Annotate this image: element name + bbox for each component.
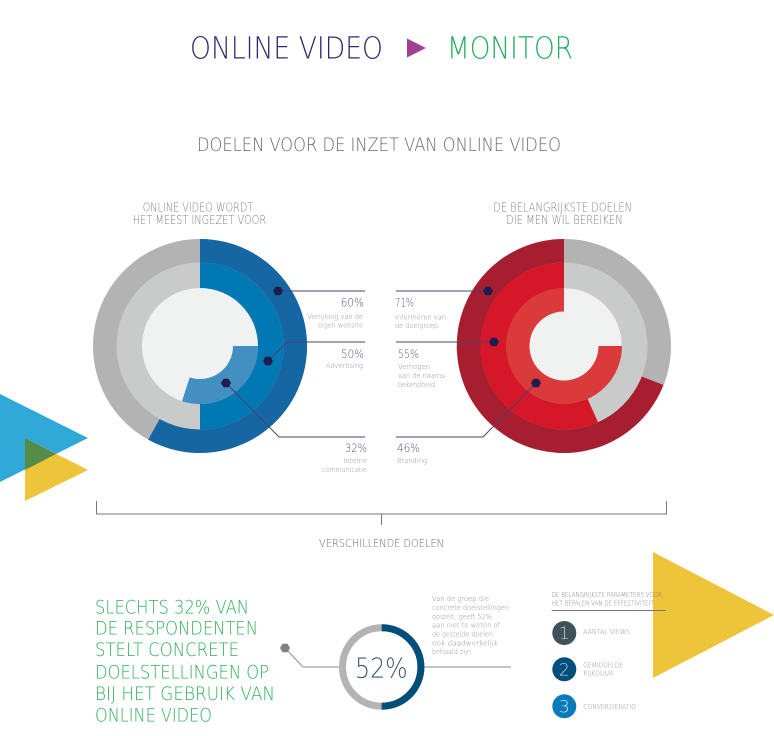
right leader lines and markers (396, 287, 541, 437)
parameter 1: 1 (559, 624, 570, 644)
green statement: DE RESPONDENTEN (95, 618, 258, 640)
label: 55%: bekendheid (398, 380, 435, 389)
decorative triangle right (653, 552, 774, 678)
donut 52%: 52% (355, 653, 408, 685)
green statement: BIJ HET GEBRUIK VAN (95, 684, 275, 705)
right chart heading (493, 201, 632, 227)
label: 46%: Branding (397, 456, 427, 465)
right chart heading: DIE MEN WIL BEREIKEN (506, 213, 623, 227)
explanatory text: de gestelde doelen (432, 630, 493, 638)
parameter 3: 3 (559, 698, 570, 718)
label: 55%: 55% (398, 347, 419, 361)
green statement: ONLINE VIDEO (95, 706, 212, 727)
green statement (95, 597, 275, 727)
connector lines (280, 644, 511, 667)
heading: DOELEN VOOR DE INZET VAN ONLINE VIDEO (197, 135, 561, 156)
left radial chart (93, 239, 307, 453)
label: 46% (397, 441, 427, 465)
label: 60%: eigen website (318, 320, 363, 330)
parameter 3: CONVERSIERATIO (583, 702, 636, 711)
parameter 2 (552, 657, 623, 681)
parameters heading: HET BEPALEN VAN DE EFFECTIVITEIT: (552, 600, 655, 608)
left chart heading (133, 201, 266, 227)
title: MONITOR (447, 31, 573, 66)
explanatory text: behaald zijn. (432, 647, 473, 656)
label: 32%: Interne (344, 456, 367, 465)
explanatory text (432, 594, 509, 656)
parameter 2: 2 (559, 660, 570, 680)
parameter 2: KIJKDUUR (583, 668, 613, 677)
explanatory text: opstelt, geeft 52% (432, 612, 492, 621)
parameters heading (552, 591, 666, 610)
parameter 1 (552, 621, 630, 645)
green statement: STELT CONCRETE (95, 640, 239, 661)
bracket (96, 501, 666, 525)
donut 52% (342, 628, 421, 706)
label: 71% (395, 296, 446, 330)
label: 60%: 60% (341, 296, 364, 310)
label: 50% (326, 347, 364, 370)
decorative triangles left (0, 394, 88, 501)
parameters heading: DE BELANGRIJKSTE PARAMETERS VOOR (552, 591, 662, 599)
label: 55%: van de naams- (398, 371, 447, 380)
label: 55% (398, 347, 447, 389)
label: 60%: Verrijking van de (307, 312, 363, 321)
explanatory text: Van de groep die (432, 594, 489, 603)
label: 55%: Verhogen (398, 362, 430, 371)
left chart heading: HET MEEST INGEZET VOOR (133, 213, 266, 227)
green statement: DOELSTELLINGEN OP (95, 662, 269, 683)
parameter 1: AANTAL VIEWS (583, 627, 630, 636)
left chart heading: ONLINE VIDEO WORDT (143, 201, 254, 215)
label: 32%: 32% (345, 441, 367, 455)
explanatory text: aan niet te weten of (432, 620, 500, 630)
label: 71%: 71% (395, 296, 414, 310)
label: 32%: communicatie (322, 465, 367, 474)
green statement: SLECHTS 32% VAN (95, 597, 249, 618)
right chart heading: DE BELANGRIJKSTE DOELEN (493, 201, 632, 215)
title: ONLINE VIDEO (190, 31, 383, 66)
label: 71%: Informeren van (395, 312, 446, 322)
explanatory text: ook daadwerkelijk (432, 638, 498, 648)
bracket label: VERSCHILLENDE DOELEN (319, 538, 444, 550)
title (190, 31, 573, 66)
explanatory text: concrete doelstellingen (432, 603, 509, 612)
parameter 3 (552, 694, 636, 718)
label: 71%: de doelgroep (395, 321, 438, 330)
label: 50%: 50% (341, 347, 364, 361)
right radial chart (457, 239, 671, 453)
label: 32% (322, 441, 367, 474)
left leader lines and markers (221, 287, 365, 437)
label: 60% (307, 296, 364, 330)
parameter 2: GEMIDDELDE (583, 660, 623, 669)
label: 50%: Advertising (326, 361, 363, 370)
label: 46%: 46% (397, 441, 420, 455)
